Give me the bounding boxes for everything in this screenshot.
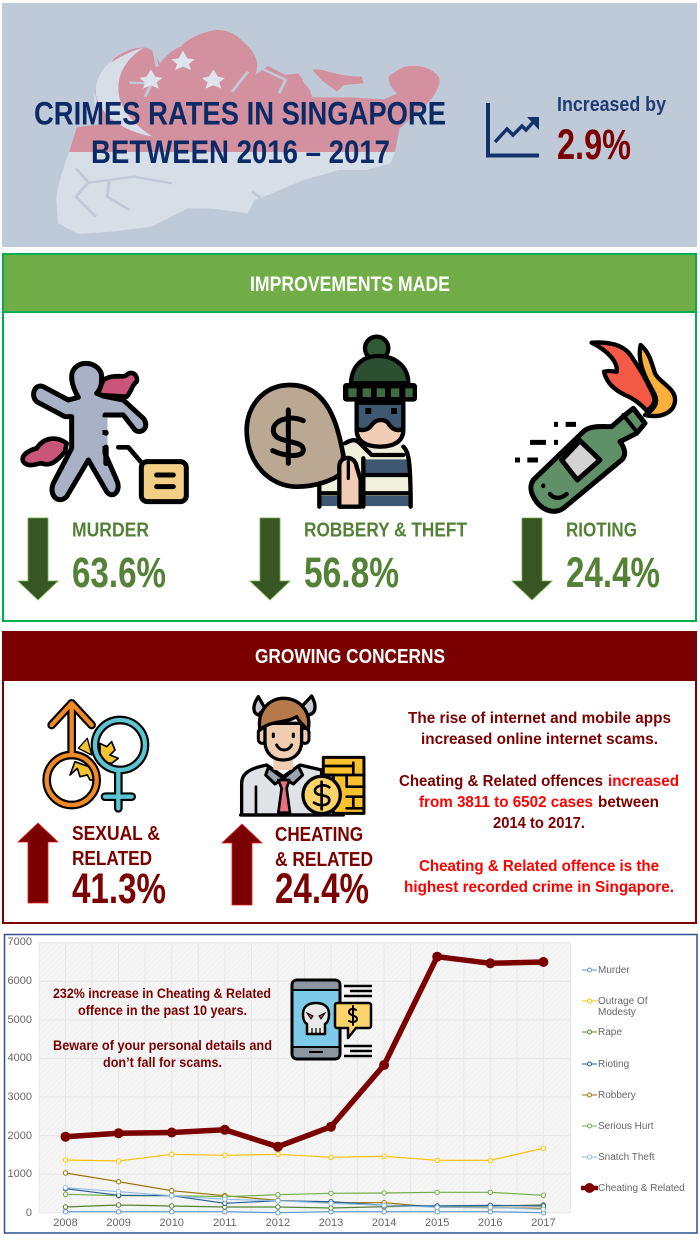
x axis labels: 2012 [266,1217,290,1229]
stat: sexual and related: RELATED [72,848,152,870]
stat: increased by 2.9% [557,94,667,169]
y axis labels: 6000 [8,975,32,987]
y axis labels: 1000 [8,1168,32,1180]
arrow down [18,518,58,600]
stat: rioting: 24.4% [566,549,660,597]
panel: line chart [4,934,697,1233]
chart annotation: don’t fall for scams. [103,1054,222,1070]
legend: Murder [598,965,630,976]
x axis labels: 2009 [106,1217,131,1229]
y axis labels: 2000 [8,1130,32,1142]
legend [581,965,685,1194]
plot area and grid [39,943,570,1213]
icon: murder outline [23,363,186,502]
title: CRIMES RATES IN SINGAPORE [34,96,446,132]
legend: Outrage Of [598,996,648,1007]
text block: scams explanation: increased online internet scams. [421,731,658,748]
heading: growing concerns: GROWING CONCERNS [255,646,445,668]
legend: Snatch Theft [598,1152,655,1163]
icon: robber with money bag [247,337,416,507]
text block: scams explanation: Cheating & Related offence is the [419,858,659,875]
icon: molotov bottle [515,342,675,511]
stat: murder: MURDER [72,520,149,542]
icon: rising chart [488,103,539,156]
text block: scams explanation [399,710,679,896]
y axis labels: 7000 [8,936,32,948]
data lines [66,957,543,1213]
stat: robbery and theft [250,518,467,600]
stat: rioting: RIOTING [566,520,637,542]
x axis labels: 2008 [53,1217,78,1229]
text block: scams explanation: The rise of internet and mobile apps [408,710,671,727]
stat: robbery and theft: 56.8% [304,549,399,597]
text block: scams explanation: between [598,794,659,811]
stat: robbery and theft: ROBBERY & THEFT [304,520,467,542]
text block: scams explanation: increased [608,773,679,790]
arrow down [250,518,290,600]
stat: cheating and related: & RELATED [275,849,373,871]
x axis labels: 2017 [531,1217,556,1229]
icon: gender symbols [47,703,145,808]
stat: murder [18,518,166,600]
legend: Rape [598,1027,622,1038]
title [34,96,446,170]
x axis labels: 2013 [319,1217,343,1229]
y axis labels: 3000 [8,1091,32,1103]
stat: increased by 2.9%: 2.9% [557,121,631,169]
legend: Modesty [598,1007,636,1018]
title: BETWEEN 2016 – 2017 [91,134,390,170]
text block: scams explanation: Cheating & Related offences [399,773,603,790]
x axis labels: 2016 [478,1217,503,1229]
x axis labels: 2015 [425,1217,449,1229]
y axis labels: 4000 [8,1052,32,1064]
icon: cheating businessman [241,696,364,815]
panel: header [2,3,697,247]
chart annotation: Beware of your personal details and [53,1037,272,1053]
x axis labels: 2014 [372,1217,396,1229]
icon: phone scam [292,980,372,1059]
chart annotation: 232% increase in Cheating & Related [53,985,271,1001]
text block: scams explanation: highest recorded crime in Singapore. [404,879,674,896]
stat: cheating and related: 24.4% [275,865,369,913]
legend: Cheating & Related [598,1183,685,1194]
stat: sexual and related: SEXUAL & [72,823,160,845]
chart annotation [53,985,272,1070]
arrow down [512,518,552,600]
x axis labels: 2011 [213,1217,237,1229]
legend: Robbery [598,1090,636,1101]
panel: growing concerns [3,632,696,923]
stat: rioting [512,518,660,600]
stat: cheating and related [222,824,373,913]
heading: improvements made: IMPROVEMENTS MADE [250,273,450,296]
x axis labels: 2010 [159,1217,184,1229]
stat: sexual and related [18,823,166,913]
text block: scams explanation: 2014 to 2017. [493,815,585,832]
chart annotation: offence in the past 10 years. [78,1002,247,1018]
x axis labels [53,1217,556,1229]
y axis labels: 0 [26,1207,32,1219]
panel: improvements made [3,254,696,621]
arrow up [222,824,262,905]
stat: murder: 63.6% [72,549,166,597]
text block: scams explanation: from 3811 to 6502 cases [419,794,593,811]
y axis labels: 5000 [8,1014,32,1026]
stat: increased by 2.9%: Increased by [557,94,667,116]
stat: sexual and related: 41.3% [72,865,166,913]
stat: cheating and related: CHEATING [275,824,363,846]
map of Singapore with flag [56,30,440,234]
y axis labels [8,936,32,1219]
legend: Serious Hurt [598,1121,654,1132]
arrow up [18,823,58,903]
legend: Rioting [598,1059,629,1070]
